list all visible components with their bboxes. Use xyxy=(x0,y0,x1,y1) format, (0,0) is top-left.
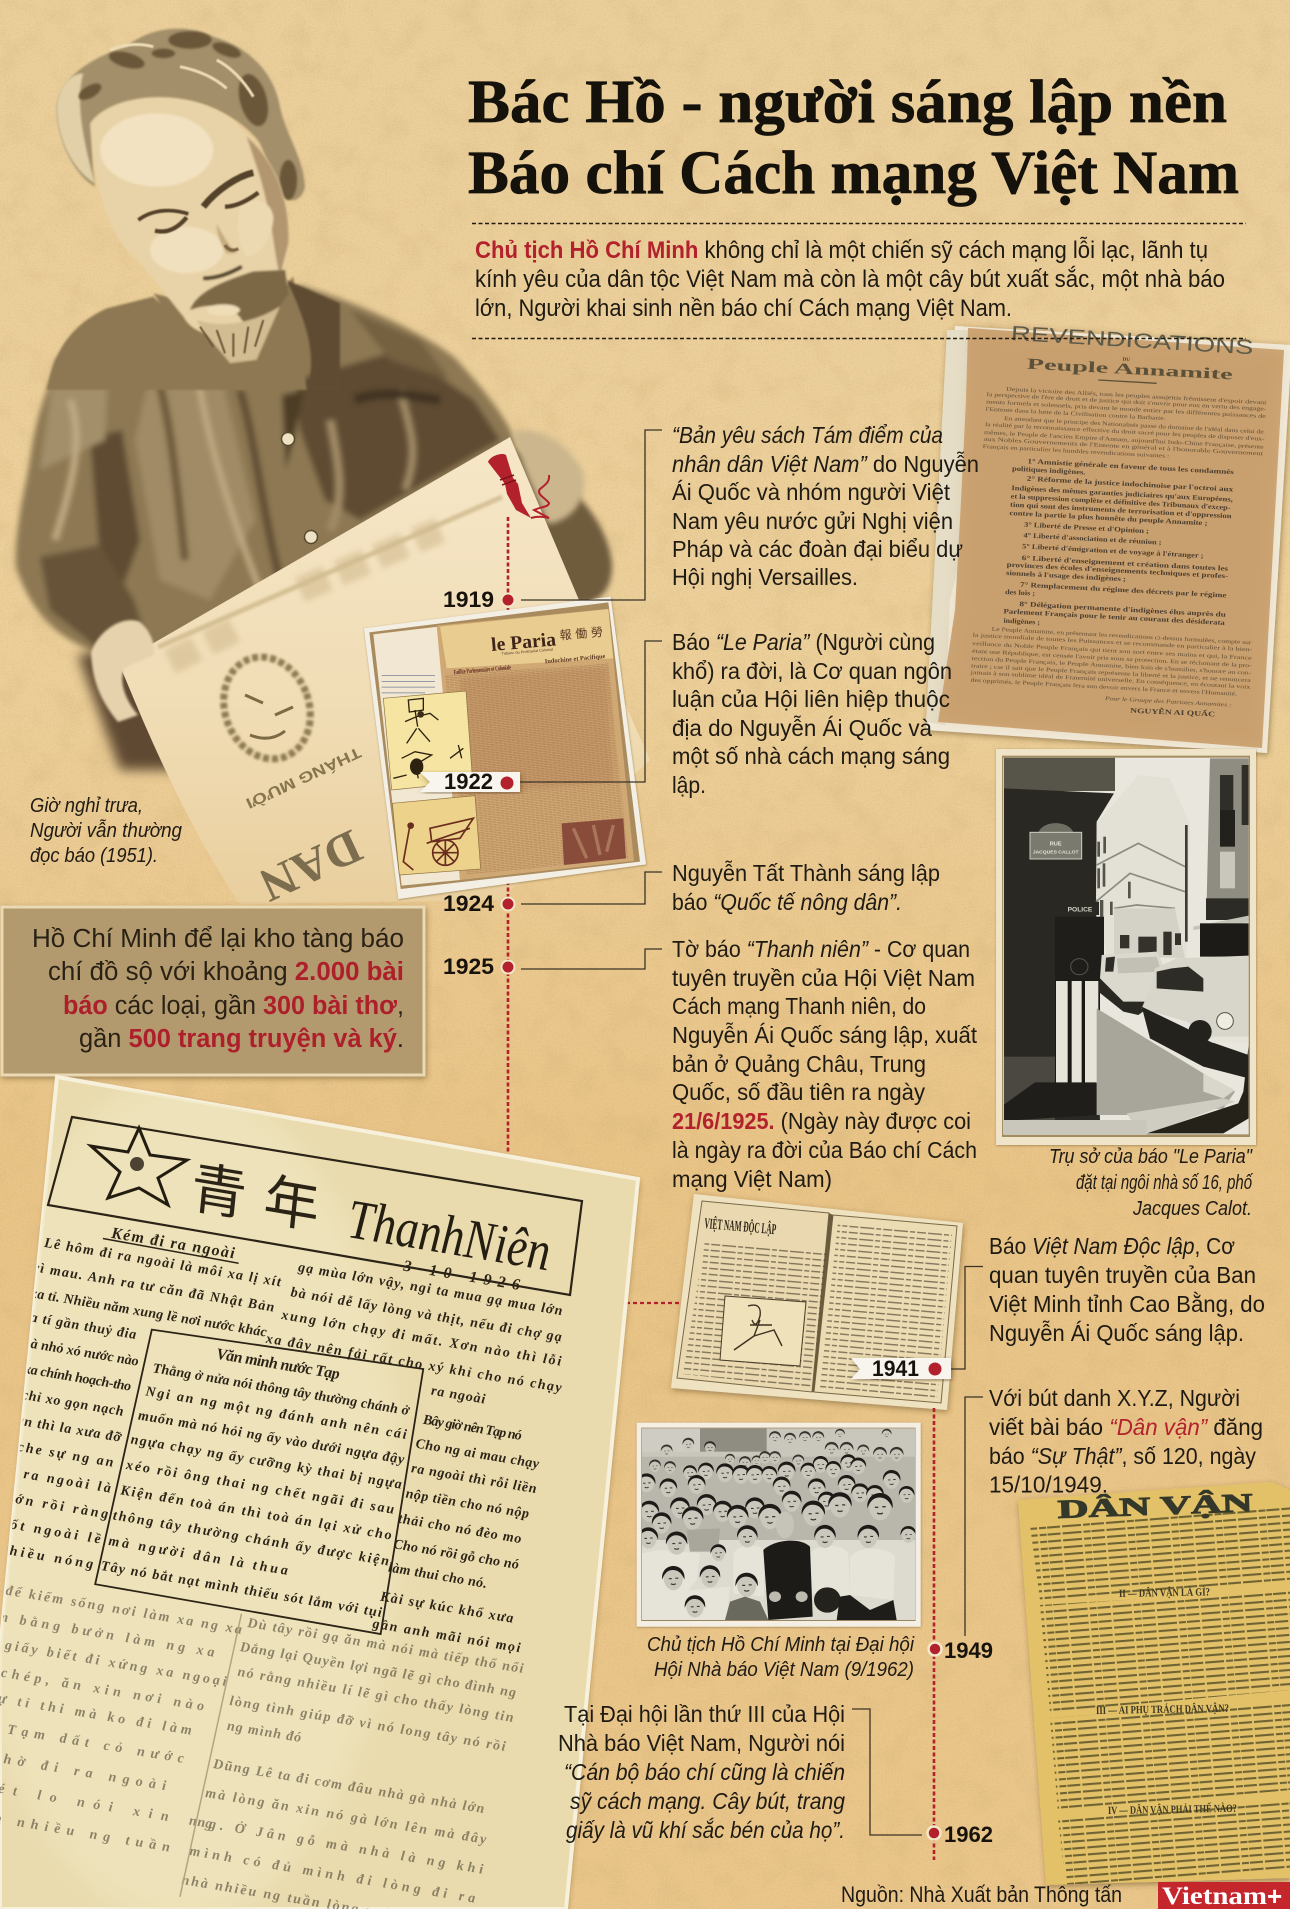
photo: Viet Nam Doc Lap book: VIỆT NAM ĐỘC LẬP xyxy=(704,1215,777,1238)
document text: 8° Délégation permanente d'indigènes élus auprès du xyxy=(1019,600,1226,619)
text block: 1962 quote: Nhà báo Việt Nam, Người nói xyxy=(558,1730,845,1756)
document text: veillance du Noble Peuple Français qui tient son sort entre ses mains et qui, la France xyxy=(972,641,1253,662)
text block: 1919 xyxy=(672,422,979,590)
Thanh Nien: boxed article: muốn mà nó hỏi ng ấy vào dưới ngựa đậy xyxy=(137,1408,406,1468)
text block: 1919: Hội nghị Versailles. xyxy=(672,564,858,590)
caption: Paris photo xyxy=(1049,1146,1253,1220)
Thanh Nien: article column right: ra ngoài xyxy=(430,1384,486,1408)
intro: dotted rules xyxy=(472,224,1246,338)
document text: des lois ; xyxy=(1005,588,1035,598)
text block: 1922: khổ) ra đời, là Cơ quan ngôn xyxy=(672,658,952,684)
timeline label: 1919 xyxy=(443,430,662,612)
Thanh Nien: article column left: vì mau. Anh ra tư căn đã Nhật Bản xyxy=(32,1260,275,1316)
Le Paria: masthead: Tribune du Prolétariat Colonial xyxy=(501,647,553,656)
text block: 1925 xyxy=(672,936,977,1192)
Thanh Nien: boxed article: ngựa chạy ng ấy cưỡng kỳ thai bị ngựa xyxy=(130,1432,402,1493)
Le Paria: masthead: le Paria xyxy=(490,629,557,656)
caption: congress photo: Hội Nhà báo Việt Nam (9/1962) xyxy=(654,1659,914,1681)
Le Paria: masthead: Faillite Parlementaire et Coloniale xyxy=(454,664,511,676)
head: dark hair tufts xyxy=(76,31,297,200)
text block: 1949 xyxy=(989,1385,1263,1498)
document text: REVENDICATIONS xyxy=(1010,322,1254,359)
caption: congress photo: Chủ tịch Hồ Chí Minh tại Đại hội xyxy=(647,1634,915,1656)
Paris: dark wall xyxy=(1003,758,1115,791)
logo: Vietnam+ xyxy=(1158,1881,1290,1909)
document text: NGUYỄN AI QUẤC xyxy=(1130,707,1215,718)
portrait: shirt folds xyxy=(55,350,440,590)
caption: Paris photo: Jacques Calot. xyxy=(1132,1198,1252,1220)
Paris: police post: POLICE xyxy=(1068,906,1093,913)
callout: press legacy: chí đồ sộ với khoảng 2.000 bài xyxy=(48,958,404,986)
document text: indigènes ; xyxy=(1003,617,1040,627)
Thanh Nien: lower faded lines: Dù tây rồi gạ ăn mà nói mà tiếp thổ nổi xyxy=(246,1616,524,1677)
Thanh Nien: lower faded lines xyxy=(0,1561,524,1909)
timeline label: 1924: 1924 xyxy=(443,891,495,916)
Thanh Nien: article column right: xa đây nên fải rất cho xý khỉ cho nó chạy xyxy=(264,1332,563,1396)
photo: Congress of Vietnam Journalists Association xyxy=(637,1423,921,1627)
photo: Dan Van article xyxy=(1018,1482,1290,1885)
document text: Peuple Annamite xyxy=(1026,356,1233,383)
Dan Van: section headings: IV — DÂN VẬN PHẢI THẾ NÀO? xyxy=(1108,1802,1237,1817)
text block: 1925: mạng Việt Nam) xyxy=(672,1166,832,1192)
icon: fountain pen xyxy=(488,454,549,518)
Thanh Nien: lower faded lines: Dắng lại Quyền lợi ngã lẽ gì cho đình ng xyxy=(238,1640,517,1701)
portrait: shirt buttons xyxy=(282,432,318,544)
head: eyes and brows xyxy=(138,173,258,250)
document text: 3° Liberté de Presse et d'Opinion ; xyxy=(1024,521,1149,535)
document text: 5° Liberté d'émigration et de voyage à l'étranger ; xyxy=(1022,542,1204,560)
text block: 1922 xyxy=(672,629,952,798)
Thanh Nien: boxed article: mà người dân là thua xyxy=(108,1534,289,1579)
Paris: right building xyxy=(1207,758,1249,902)
timeline label: 1922: 1922 xyxy=(444,769,493,794)
text block: 1925: Quốc, số đầu tiên ra ngày xyxy=(672,1079,925,1105)
document text: la perspective de l'ère de droit et de justice qui doit s'ouvrir pour eux en vertu des engage- xyxy=(987,392,1267,413)
text block: 1941: Nguyễn Ái Quốc sáng lập. xyxy=(989,1320,1244,1346)
Thanh Nien: lower faded lines: mà lòng ăn xin nó gà lớn lên mà đây xyxy=(205,1786,488,1848)
timeline label: 1941: 1941 xyxy=(872,1356,919,1381)
document text: tection du Peuple Français, le Peuple Annamite, bien loin de s'humilier, s'honore au con- xyxy=(972,656,1252,677)
Thanh Nien: lower faded lines: nó rằng nhiều lí lẽ gì cho thấy lòng tin xyxy=(237,1665,514,1726)
Thanh Nien: article column left: xa tỉ. Nhiều năm xung lề nơi nước khác xyxy=(28,1286,267,1341)
Le Paria: illustration xyxy=(562,818,626,865)
Thanh Nien: lower faded lines: ng mình đó xyxy=(226,1719,302,1746)
callout: press legacy xyxy=(2,907,424,1075)
portrait: Ho Chi Minh reading a newspaper xyxy=(16,29,650,912)
timeline label: 1919: 1919 xyxy=(443,587,494,612)
caption: portrait: Giờ nghỉ trưa, xyxy=(30,795,143,817)
group: middle rows xyxy=(638,1454,914,1534)
timeline: lower dashed axis xyxy=(933,1408,935,1860)
group: front row xyxy=(639,1525,916,1617)
source: Nguồn: Nhà Xuất bản Thông tấn xyxy=(841,1882,1122,1907)
head: light hair xyxy=(57,73,95,183)
document text: 2° Réforme de la justice indochinoise par l'octroi aux xyxy=(1027,475,1234,494)
Thanh Nien: article column left: Kém đi ra ngoài xyxy=(110,1225,236,1263)
text block: 1962 quote: Tại Đại hội lần thứ III của Hội xyxy=(564,1701,845,1727)
document text: sionnels à l'usage des indigènes ; xyxy=(1006,569,1126,583)
Thanh Nien: boxed article: Thằng ở nửa nói thông tây thường chánh ở xyxy=(152,1361,411,1419)
document text: étant une République, est censée l'avoir pris sous sa protection. En se réclamant de la pro- xyxy=(972,649,1252,669)
text block: 1922: luận của Hội liên hiệp thuộc xyxy=(672,686,950,712)
document text: Le Peuple Annamite, en présentant les revendications ci-dessus formulées, compte sur xyxy=(992,626,1252,646)
text block: 1962 quote: sỹ cách mạng. Cây bút, trang xyxy=(570,1788,845,1814)
Thanh Nien: article column left: xo xa chính hoạch-tho xyxy=(6,1359,132,1395)
Thanh Nien: article column left: xa tí gần thuỷ đia xyxy=(21,1309,137,1343)
text block: 1924: Nguyễn Tất Thành sáng lập xyxy=(672,860,940,886)
callout: press legacy: Hồ Chí Minh để lại kho tàng báo xyxy=(32,925,404,953)
text block: 1941: Báo Việt Nam Độc lập, Cơ xyxy=(989,1233,1235,1259)
document text: 1° Amnistie générale en faveur de tous les condamnés xyxy=(1027,457,1234,476)
group: President in dark shirt xyxy=(763,1512,813,1620)
Thanh Nien: article column right: nộp tiền cho nó nộp xyxy=(405,1487,530,1522)
Dan Van: masthead: DÂN VẬN xyxy=(1057,1488,1253,1524)
document text: aux Nobles Gouvernements de l'Entente en général et à l'honorable Gouvernement xyxy=(983,437,1264,457)
text block: 1949: 15/10/1949. xyxy=(989,1472,1108,1498)
document text: jamais à son sublime idéal de Fraternité universelle. En conséquence, en écoutant la voix xyxy=(969,670,1251,691)
document text: Pour le Groupe des Patriotes Annamites : xyxy=(1104,696,1232,709)
text block: 1922: lập. xyxy=(672,772,706,798)
timeline label: 1925: 1925 xyxy=(443,954,494,979)
text block: 1925: Nguyễn Ái Quốc sáng lập, xuất xyxy=(672,1022,977,1048)
Thanh Nien: lower faded lines: ng. Ở Jân gỗ mà nhà là ng khi xyxy=(197,1813,484,1878)
document text: Français en particulier les humbles revendications suivantes : xyxy=(983,444,1170,460)
document text: DU xyxy=(1123,358,1130,363)
document text: mêmes, le Peuple de l'ancien Empire d'Annam, aujourd'hui Indo-Chine Française, présente xyxy=(984,430,1264,451)
Thanh Nien: article column right: bà nói dễ lấy lòng và thịt, nếu đi chợ gạ xyxy=(290,1285,562,1346)
Le Paria: masthead xyxy=(454,623,606,676)
document text: Parlement Français pour le tenir au courant des désiderata xyxy=(1003,607,1226,627)
Thanh Nien: boxed article: Tây nó bắt nạt mình thiếu sót lắm với tụi xyxy=(100,1559,383,1621)
document text: Indigènes des mêmes garanties judiciaires qu'aux Européens, xyxy=(1011,484,1233,504)
head: neck and collar xyxy=(47,277,340,390)
text block: 1925: là ngày ra đời của Báo chí Cách xyxy=(672,1137,977,1163)
Paris: street sign: JACQUES CALLOT xyxy=(1033,850,1079,856)
Thanh Nien: article column right: Bây giờ nên Tạp nó xyxy=(421,1412,522,1444)
document text: des opprimés, le Peuple Français fera son devoir envers la France et envers l'Humanité. xyxy=(971,677,1238,698)
text block: 1962 quote: giấy là vũ khí sắc bén của họ”. xyxy=(566,1817,845,1843)
text block: 1922: Báo “Le Paria” (Người cùng xyxy=(672,629,935,655)
timeline label: 1949: 1949 xyxy=(944,1638,993,1663)
portrait: newspaper print: THÁNG MƯỜI xyxy=(243,743,364,813)
paper: Revendications du Peuple Annamite xyxy=(926,322,1290,753)
Paris: building xyxy=(1096,823,1097,900)
title: Báo chí Cách mạng Việt Nam xyxy=(468,140,1239,207)
Thanh Nien: lower faded lines: Dũng Lê ta đi cơm đâu nhà gà nhà lớn xyxy=(212,1757,485,1817)
text block: 1919: Pháp và các đoàn đại biểu dự xyxy=(672,536,963,562)
Thanh Nien: article column right: xung lớn chạy đi mất. Xơn nào thì lỗi xyxy=(280,1308,562,1370)
Thanh Nien: article column left: nhà nhỏ xó nước nào xyxy=(15,1334,139,1370)
Thanh Nien: article column right: Kài sự kúc khổ xưa xyxy=(379,1589,514,1627)
text block: 1949: viết bài báo “Dân vận” đăng xyxy=(989,1414,1263,1440)
text block: 1924: báo “Quốc tế nông dân”. xyxy=(672,889,902,915)
book: sketch xyxy=(720,1296,806,1366)
Dan Van: section headings: II — DÂN VẬN LÀ GÌ? xyxy=(1119,1585,1210,1600)
text block: 1919: Ái Quốc và nhóm người Việt xyxy=(672,479,950,505)
text block: 1949: báo “Sự Thật”, số 120, ngày xyxy=(989,1443,1256,1469)
text block: 1925: tuyên truyền của Hội Việt Nam xyxy=(672,965,975,991)
Thanh Nien: boxed article xyxy=(95,1319,423,1637)
document text: tion qui sont des instruments de terrorisation et d'oppression xyxy=(1010,501,1232,520)
Thanh Nien: masthead: 青年 xyxy=(188,1156,322,1240)
callout: press legacy: gần 500 trang truyện và ký. xyxy=(79,1025,404,1053)
Thanh Nien: boxed article: Ngi an ng một ng đánh anh nên cái xyxy=(144,1384,407,1443)
text block: 1924 xyxy=(672,860,940,915)
intro paragraph: kính yêu của dân tộc Việt Nam mà còn là một cây bút xuất sắc, một nhà báo xyxy=(475,266,1225,293)
callout: press legacy: báo các loại, gần 300 bài thơ, xyxy=(63,992,404,1020)
text block: 1941 xyxy=(989,1233,1265,1346)
Thanh Nien: article column right: Cho ng ai mau chạy xyxy=(415,1437,540,1472)
caption: portrait: Người vẫn thường xyxy=(30,819,182,842)
group: white shirts xyxy=(642,1545,895,1620)
intro paragraph: lớn, Người khai sinh nền báo chí Cách mạng Việt Nam. xyxy=(475,295,1012,322)
Thanh Nien: article column right: ra ngoài thì rỗi liền xyxy=(411,1461,537,1497)
portrait: head xyxy=(47,29,340,390)
photo: Thanh Nien handwritten newspaper xyxy=(0,1077,638,1909)
document text: politiques indigènes. xyxy=(1012,465,1086,477)
Thanh Nien: article column right xyxy=(266,1265,562,1654)
Le Paria: cartoon 1 xyxy=(383,691,473,790)
document text: provinces des écoles d'enseignements techniques et profes- xyxy=(1007,561,1229,580)
document text: contre la partie la plus honnête du peuple Annamite ; xyxy=(1009,509,1208,527)
portrait: right hand xyxy=(512,430,584,524)
Thanh Nien: header frame xyxy=(48,1117,582,1295)
photo: Viet Nam Doc Lap book xyxy=(671,1194,963,1410)
document text: 7° Remplacement du régime des décrets par le régime xyxy=(1020,581,1227,599)
Dan Van: body lines xyxy=(1030,1505,1290,1600)
portrait: right arm xyxy=(500,440,612,603)
timeline label: 1922 xyxy=(420,641,662,794)
Thanh Nien: star xyxy=(91,1128,187,1205)
timeline connector: 1949 xyxy=(965,1397,983,1636)
text block: 1925: 21/6/1925. (Ngày này được coi xyxy=(672,1108,971,1134)
text block: 1941: quan tuyên truyền của Ban xyxy=(989,1262,1256,1288)
head: hair mass xyxy=(57,29,305,200)
Le Paria: masthead: Indochine et Pacifique xyxy=(545,653,606,665)
document text: la réalité par la reconnaissance effective du droit sacré pour les peuples de disposer d'eux- xyxy=(985,421,1265,443)
Thanh Nien: lower faded lines: lòng tình giúp đỡ vì nó long tây nó rồi xyxy=(229,1694,506,1755)
text block: 1962 quote xyxy=(558,1701,845,1843)
photo: Thanh Nien handwritten newspaper: 3-10-1926 xyxy=(402,1257,521,1294)
Le Paria: page xyxy=(437,609,634,880)
intro paragraph: Chủ tịch Hồ Chí Minh không chỉ là một chiến sỹ cách mạng lỗi lạc, lãnh tụ xyxy=(475,237,1208,264)
Thanh Nien: article column left: thì chỉ xo gọn nạch xyxy=(0,1384,124,1420)
document text: la justice mondiale de toutes les Puissances et se recommande en particulier à la bien- xyxy=(973,633,1253,653)
text block: 1925: Cách mạng Thanh niên, do xyxy=(672,993,926,1019)
Paris: street sign: RUE xyxy=(1050,842,1062,848)
Paris: far car xyxy=(1100,952,1163,1002)
Le Paria: masthead: 報 働 勞 xyxy=(559,623,604,644)
torn left strip xyxy=(926,330,972,725)
Thanh Nien: boxed article: xéo rồi ông thai ng chết ngãi đi sau xyxy=(124,1458,395,1518)
Thanh Nien: article column right: làm thui cho nó. xyxy=(387,1561,488,1592)
Thanh Nien: article column right: Cho nó rồi gỗ cho nó xyxy=(393,1537,519,1573)
text block: 1925: bản ở Quảng Châu, Trung xyxy=(672,1051,926,1077)
Dan Van: section headings xyxy=(1096,1585,1237,1817)
document text: ments formels et solennels, pris devant le monde entier par les différentes puissances de xyxy=(986,398,1267,420)
Le Paria: left clipping text xyxy=(382,675,435,693)
Le Paria: cartoon 2 xyxy=(392,796,481,875)
Thanh Nien: article column left: Lê hôm đi ra ngoài là môi xa lị xít xyxy=(43,1236,283,1291)
head: moustache and beard xyxy=(190,267,288,363)
Thanh Nien: boxed article: Kiện đến toà án thì toà án lại xử cho xyxy=(119,1483,392,1544)
Paris: near car xyxy=(1142,956,1249,1038)
document text: 6° Liberté d'enseignement et création dans toutes les xyxy=(1022,554,1229,573)
Thanh Nien: lower faded lines: mình có đủ mình đi lòng đi ra xyxy=(189,1844,476,1907)
timeline: upper dashed axis xyxy=(508,517,686,1303)
portrait: newspaper print xyxy=(158,497,502,912)
text block: 1919: nhân dân Việt Nam” do Nguyễn xyxy=(672,451,979,477)
Thanh Nien: boxed article: Văn minh nước Tạp xyxy=(216,1346,340,1383)
Thanh Nien: article column right: gạ mùa lớn vậy, ngi ta mua gạ mua lớn xyxy=(297,1260,563,1319)
document text: En attendant que le principe des Nationalités passe du domaine de l'idéal dans celui de xyxy=(1004,416,1264,436)
group: back rows xyxy=(649,1429,904,1474)
text block: 1919: Nam yêu nước gửi Nghị viện xyxy=(672,508,953,534)
text block: 1925: Tờ báo “Thanh niên” - Cơ quan xyxy=(672,936,970,962)
portrait: newspaper print: DAN xyxy=(251,819,370,912)
caption: congress photo xyxy=(647,1634,915,1681)
document text: traire ; car il sait que le Peuple Français représente la liberté et la justice, et ne renoncera xyxy=(971,663,1251,684)
timeline label: 1941 xyxy=(851,1266,983,1381)
Le Paria: left clipping xyxy=(373,627,460,886)
text block: 1941: Việt Minh tỉnh Cao Bằng, do xyxy=(989,1291,1265,1317)
text block: 1949: Với bút danh X.Y.Z, Người xyxy=(989,1385,1240,1411)
head: face xyxy=(90,97,288,335)
photo: Le Paria newspaper xyxy=(364,597,646,899)
book: text lines xyxy=(683,1240,826,1388)
title: Bác Hồ - người sáng lập nền xyxy=(468,69,1227,136)
text block: 1962 quote: “Cán bộ báo chí cũng là chiến xyxy=(564,1759,845,1785)
timeline label: 1925 xyxy=(443,949,662,979)
Thanh Nien: article column right: gần anh mãi nói mọi xyxy=(371,1616,521,1656)
title xyxy=(468,69,1239,207)
text block: 1919: “Bản yêu sách Tám điểm của xyxy=(672,422,943,448)
document text: 4° Liberté d'association et de réunion ; xyxy=(1023,531,1162,547)
portrait: left hand xyxy=(91,620,154,722)
text block: 1922: địa do Nguyễn Ái Quốc và xyxy=(672,715,933,741)
timeline label: 1962 xyxy=(852,1709,993,1847)
Paris: police post xyxy=(1003,902,1104,1121)
caption: portrait xyxy=(30,795,182,867)
Dan Van: section headings: III — AI PHỤ TRÁCH DÂN VẬN? xyxy=(1096,1702,1229,1717)
timeline label: 1962: 1962 xyxy=(944,1822,993,1847)
portrait: sleeve shadow xyxy=(78,640,190,770)
Thanh Nien: article column left xyxy=(10,1228,282,1571)
text block: 1922: một số nhà cách mạng sáng xyxy=(672,743,950,769)
photo: Paris street, Jacques Callot xyxy=(996,749,1256,1145)
document text: et la suppression complète et définitive des Tribunaux d'excep- xyxy=(1011,492,1231,512)
Thanh Nien: boxed article: thông tây thường chánh ấy được kiện xyxy=(112,1508,390,1570)
portrait: shirt xyxy=(16,285,540,660)
portrait: newspaper xyxy=(119,437,650,904)
Paris: road xyxy=(1097,1008,1235,1115)
caption: Paris photo: Trụ sở của báo "Le Paria" xyxy=(1049,1146,1253,1168)
document text: l'Entente dans la lutte de la Civilisation contre la Barbarie. xyxy=(986,407,1166,422)
photo: Thanh Nien handwritten newspaper: ThanhNiên xyxy=(345,1188,553,1284)
document text: Depuis la victoire des Alliés, tous les peuples assujettis frémissent d'espoir devant xyxy=(1006,386,1267,406)
document text xyxy=(969,322,1267,718)
Thanh Nien: article column right: thải cho nó đèo mo xyxy=(397,1512,522,1547)
Paris: street sign xyxy=(1030,823,1082,859)
timeline label: 1924 xyxy=(443,872,662,916)
intro paragraph xyxy=(475,237,1225,322)
caption: portrait: đọc báo (1951). xyxy=(30,845,158,867)
